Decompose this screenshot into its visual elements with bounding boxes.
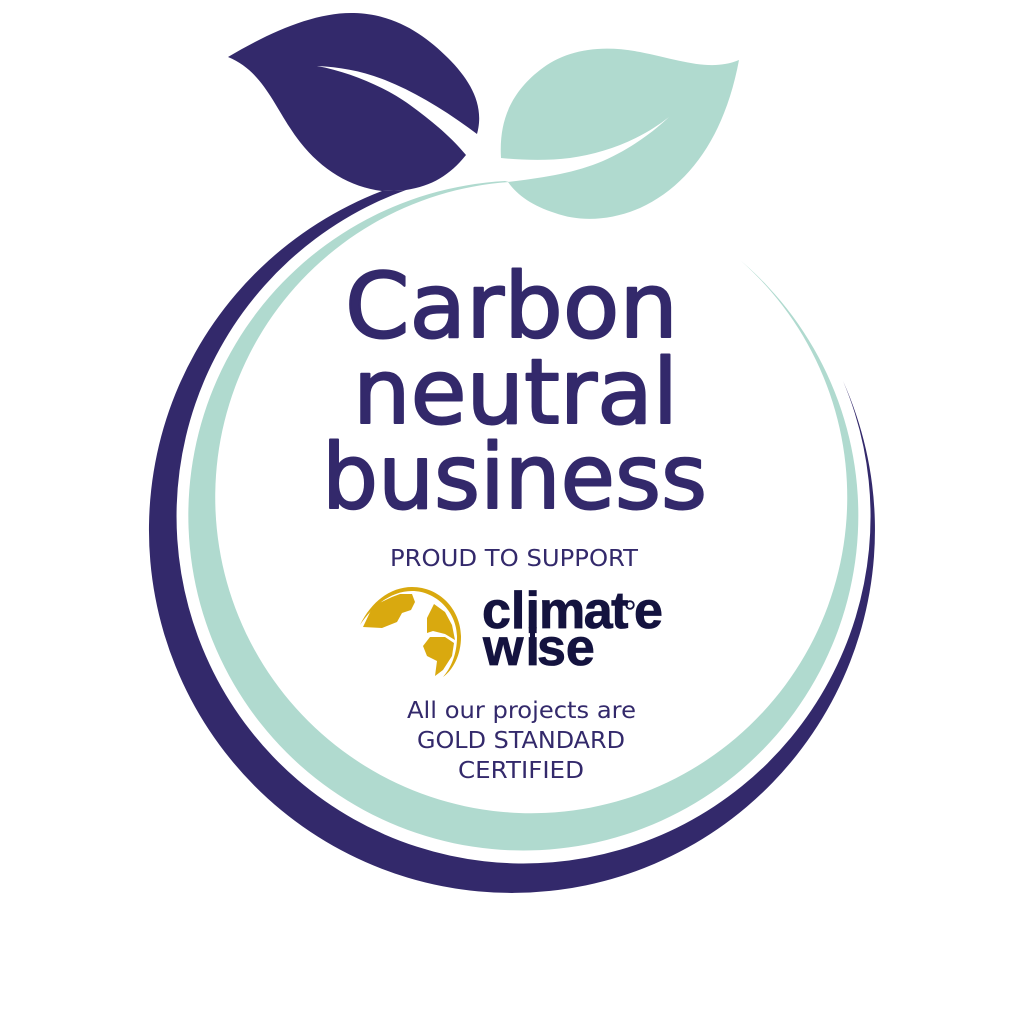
climate wise logo <box>482 582 663 677</box>
support caption: PROUD TO SUPPORT <box>390 546 639 572</box>
certification text <box>407 698 636 784</box>
climate wise logo: i <box>526 582 540 640</box>
dark leaf <box>228 13 479 191</box>
certification text: All our projects are <box>407 698 636 724</box>
climate wise logo: mat <box>539 582 628 640</box>
dark outer ring <box>149 190 875 893</box>
climate wise logo: cl <box>482 582 525 640</box>
climate wise logo: se <box>537 619 595 677</box>
title <box>322 254 707 530</box>
teal leaf <box>501 49 739 219</box>
certification text: CERTIFIED <box>458 758 584 784</box>
climate wise logo: i <box>526 619 540 677</box>
title: business <box>322 425 707 530</box>
teal inner ring <box>188 181 858 850</box>
title: neutral <box>353 340 678 445</box>
climate wise logo: w <box>483 619 523 677</box>
climate wise logo: e <box>634 582 663 640</box>
certification text: GOLD STANDARD <box>417 728 625 754</box>
title: Carbon <box>345 254 678 359</box>
icon: gold globe <box>360 587 461 677</box>
